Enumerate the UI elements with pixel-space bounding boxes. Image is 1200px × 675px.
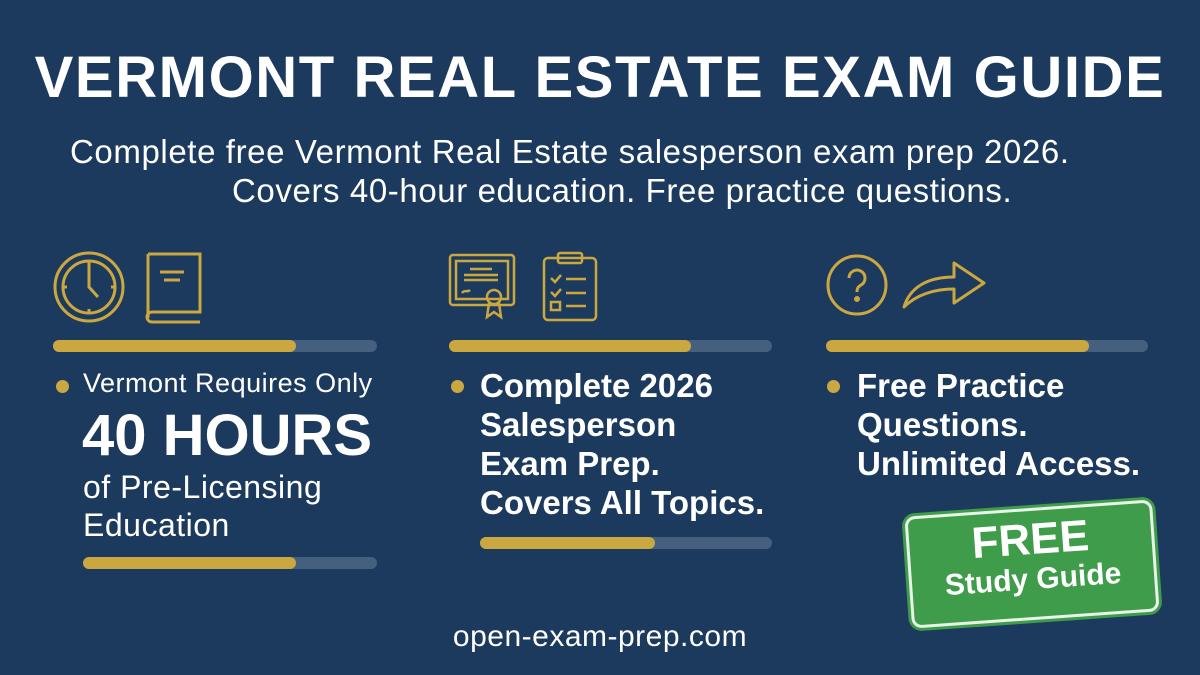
panel: practice: Unlimited Access. (857, 445, 1140, 482)
text: 40 HOURS (82, 403, 372, 468)
panel: practice: Questions. (857, 406, 1028, 443)
progress bar (53, 340, 377, 352)
progress bar (83, 557, 377, 569)
progress bar (480, 537, 772, 549)
subtitle: Covers 40-hour education. Free practice questions. (232, 172, 1012, 209)
text (827, 380, 840, 393)
icon: book (146, 252, 202, 324)
icon: clock (54, 252, 124, 322)
subtitle: Complete free Vermont Real Estate salesperson exam prep 2026. (70, 133, 1070, 170)
subtitle (70, 133, 1070, 209)
icon: question (826, 254, 888, 316)
icon: arrow (902, 262, 986, 309)
text: Education (83, 507, 230, 543)
badge: free study guide (904, 499, 1160, 629)
progress bar (449, 340, 772, 352)
footer url: open-exam-prep.com (453, 620, 747, 653)
panel: exam prep (448, 252, 772, 549)
icon: clipboard (542, 252, 598, 322)
icon: certificate (448, 254, 516, 320)
title: VERMONT REAL ESTATE EXAM GUIDE (35, 45, 1165, 110)
panel: exam prep: Salesperson (480, 406, 676, 443)
panel: practice: Free Practice (857, 367, 1064, 404)
panel: exam prep: Exam Prep. (480, 445, 660, 482)
text (451, 380, 464, 393)
progress bar (826, 340, 1148, 352)
panel: exam prep: Complete 2026 (480, 367, 713, 404)
text: Vermont Requires Only (83, 368, 373, 398)
panel: practice (826, 254, 1148, 482)
badge: free study guide: FREE (970, 511, 1091, 568)
text: of Pre-Licensing (83, 469, 322, 505)
badge: free study guide: Study Guide (944, 557, 1122, 602)
panel: exam prep: Covers All Topics. (480, 484, 764, 521)
text (56, 368, 373, 543)
panel: hours (53, 252, 377, 569)
